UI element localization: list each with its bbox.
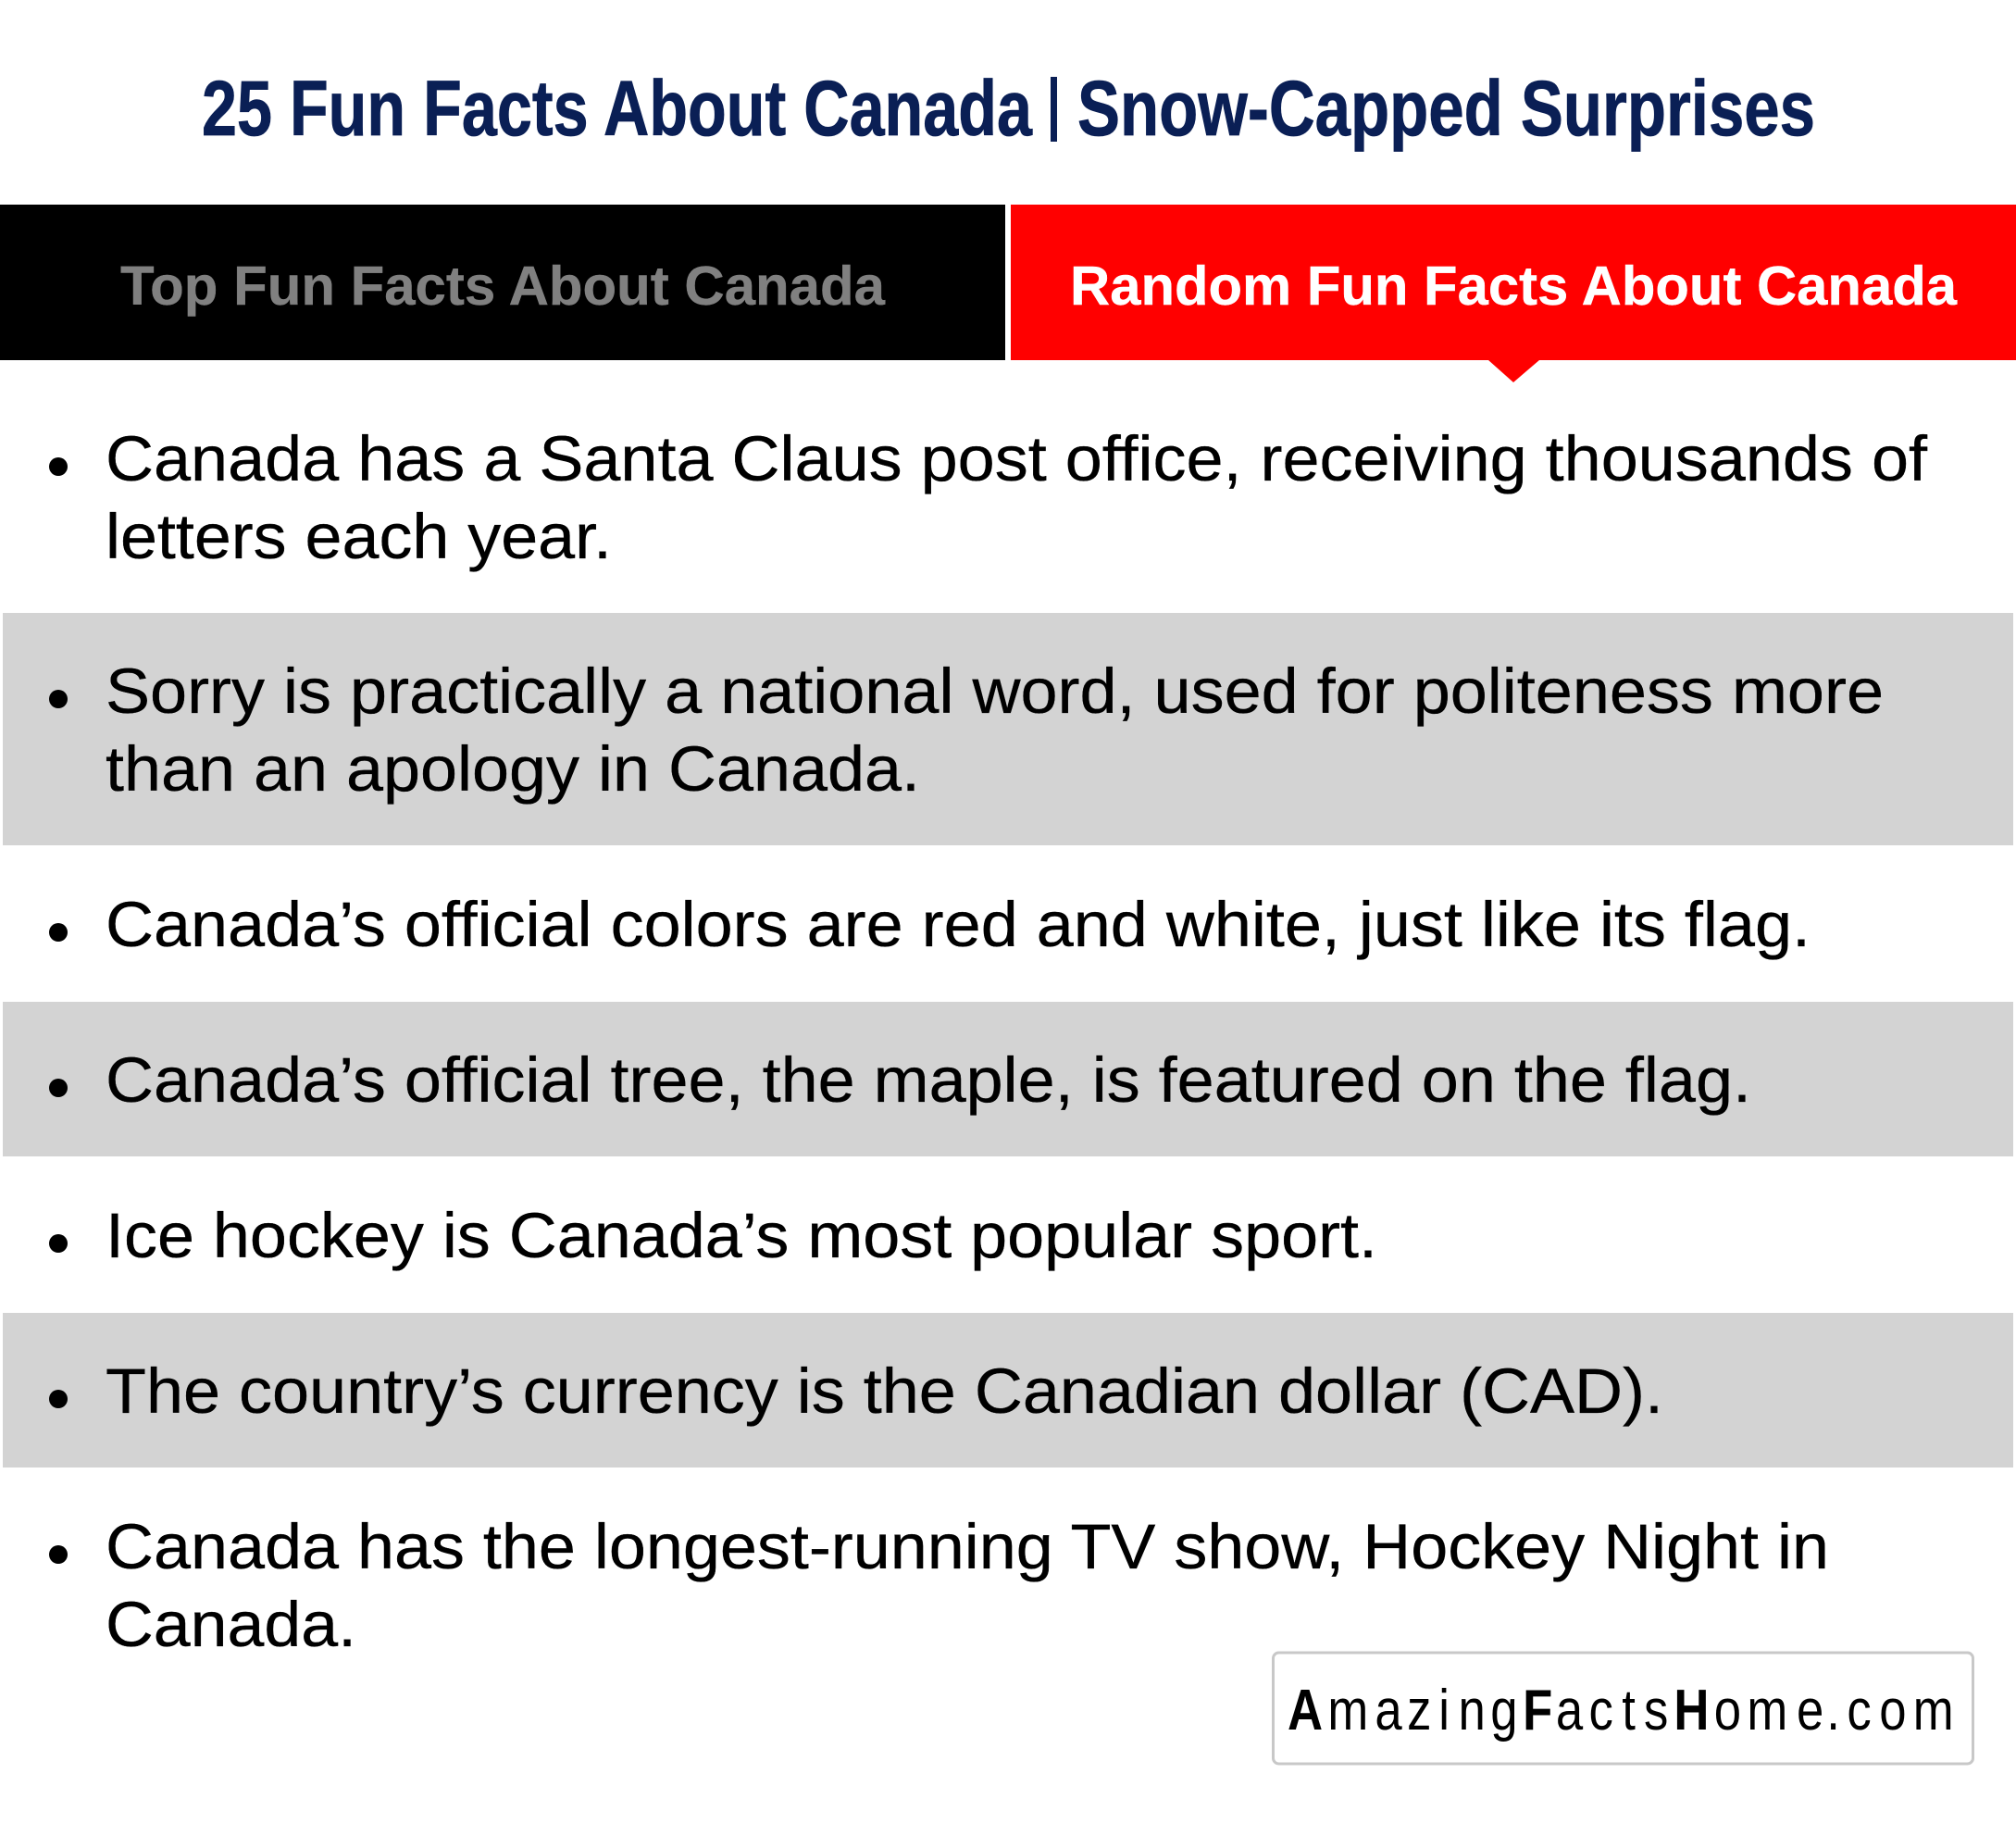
fact 2 row	[3, 613, 2013, 845]
fact 7: Canada has the longest-running TV show, Hockey Night in	[106, 1511, 1829, 1582]
title	[202, 65, 1815, 152]
fact 4 row: Canada’s official tree, the maple, is featured on the flag.	[106, 1044, 1751, 1116]
fact 1: letters each year.	[106, 501, 612, 572]
fact 1: Canada has a Santa Claus post office, receiving thousands of	[106, 423, 1928, 494]
watermark: AmazingFactsHome.com	[1274, 1653, 1973, 1764]
fact 4 row	[3, 1002, 2013, 1156]
watermark: AmazingFactsHome.com: acts	[1556, 1679, 1668, 1742]
fact 2 row: Sorry is practically a national word, used for politeness more	[106, 656, 1884, 727]
tab: top fun facts	[0, 205, 1005, 360]
fact 2 row: than an apology in Canada.	[106, 733, 920, 805]
watermark: AmazingFactsHome.com: ome.com	[1714, 1679, 1954, 1742]
watermark: AmazingFactsHome.com: H	[1674, 1679, 1709, 1742]
fact 6 row	[3, 1313, 2013, 1468]
tab: random fun facts (active)	[1011, 205, 2016, 382]
tab: random fun facts (active): Random Fun Facts About Canada	[1070, 256, 1958, 317]
fact 7	[49, 1511, 1829, 1660]
fact 1	[49, 423, 1928, 572]
fact 3: Canada’s official colors are red and white, just like its flag.	[106, 889, 1811, 960]
watermark: AmazingFactsHome.com: F	[1523, 1679, 1552, 1742]
title: 25 Fun Facts About Canada	[202, 65, 1033, 152]
tab: top fun facts: Top Fun Facts About Canada	[120, 256, 886, 317]
watermark: AmazingFactsHome.com: A	[1288, 1679, 1323, 1742]
watermark: AmazingFactsHome.com: mazing	[1327, 1679, 1518, 1742]
fact 6 row: The country’s currency is the Canadian dollar (CAD).	[106, 1355, 1663, 1427]
fact 5: Ice hockey is Canada’s most popular sport.	[106, 1200, 1377, 1271]
title: Snow-Capped Surprises	[1077, 65, 1815, 152]
fact 7: Canada.	[106, 1589, 356, 1660]
